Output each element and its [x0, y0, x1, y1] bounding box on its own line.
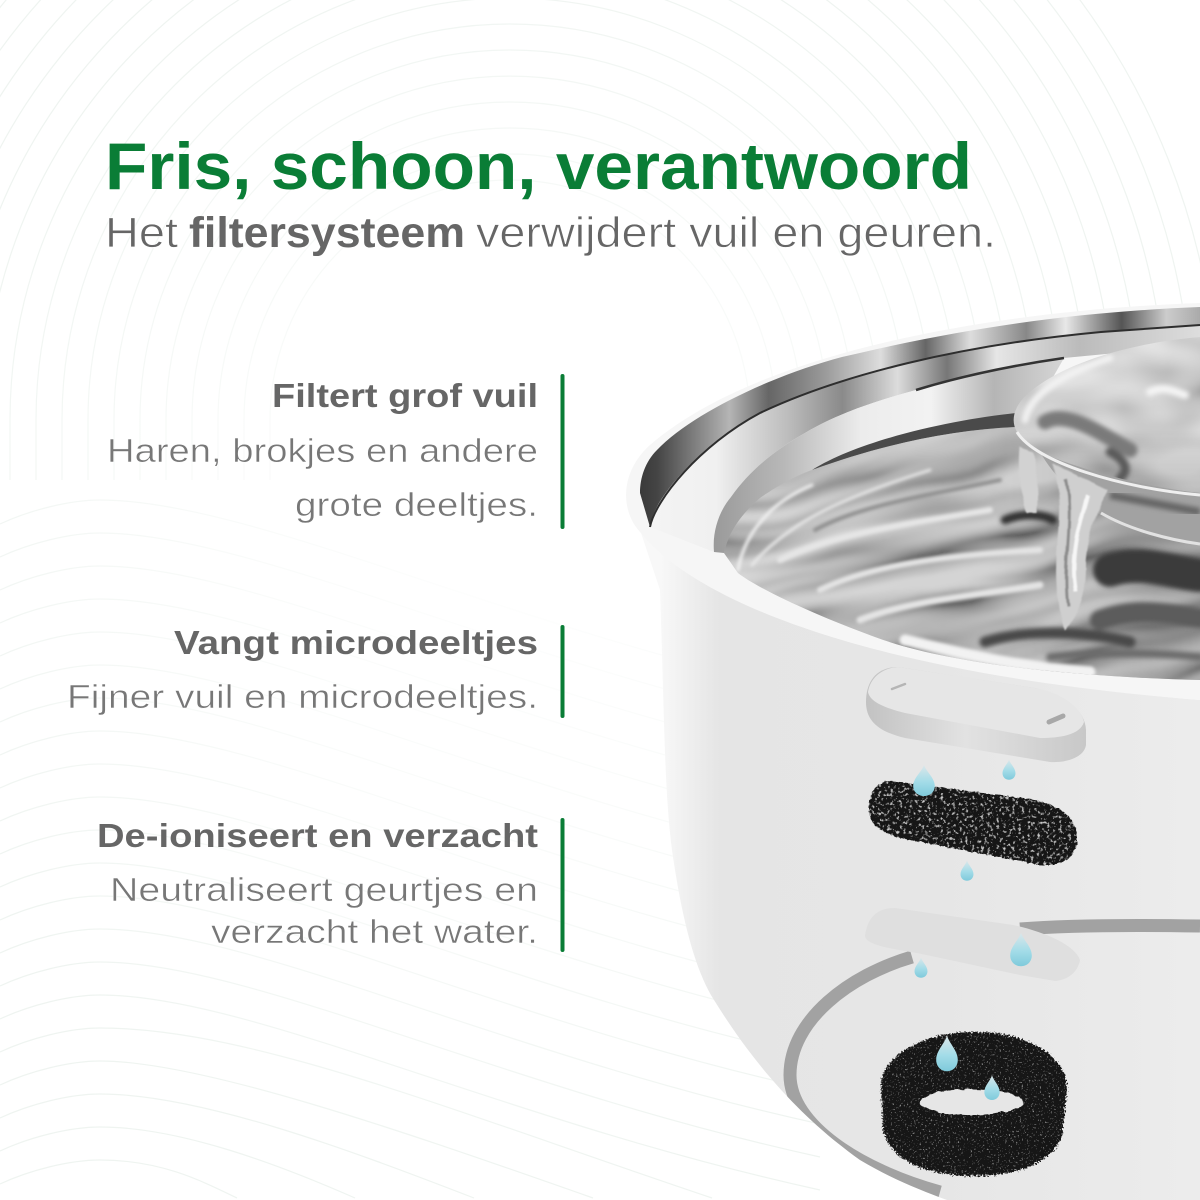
text block: filtert grof vuil: grote deeltjes.	[295, 486, 538, 523]
water drop 5	[915, 958, 927, 978]
text block: vangt microdeeltjes: Fijner vuil en microdeeltjes.	[67, 678, 538, 715]
dark water line	[812, 413, 1016, 470]
bowl rim lip	[626, 303, 1200, 700]
subtitle: Het	[105, 209, 178, 257]
bowl body	[640, 530, 1200, 1200]
text block: filtert grof vuil	[107, 374, 564, 529]
filter plate	[866, 667, 1086, 762]
text block: filtert grof vuil: Filtert grof vuil	[272, 377, 538, 414]
fountain illustration	[626, 303, 1200, 1200]
grey ring on base	[790, 925, 1200, 1192]
water ripples	[724, 427, 1200, 680]
water drop 7	[984, 1075, 1000, 1100]
water drop 6	[936, 1036, 958, 1071]
second metal band	[650, 325, 1200, 552]
dome lip and glass base	[1017, 432, 1200, 545]
carbon filter	[869, 781, 1077, 865]
text block: de-ioniseert en verzacht: Neutraliseert geurtjes en	[110, 871, 538, 908]
water drop 4	[1010, 933, 1032, 966]
text block: vangt microdeeltjes: Vangt microdeeltjes	[174, 624, 538, 661]
water drop 3	[961, 861, 973, 881]
subtitle	[105, 209, 996, 257]
water drop 2	[1003, 760, 1015, 780]
text block: de-ioniseert en verzacht	[97, 817, 564, 952]
water drop 1	[913, 765, 935, 796]
glass dome	[1014, 337, 1200, 493]
title: Fris, schoon, verantwoord	[105, 129, 972, 203]
subtitle: filtersysteem	[189, 209, 465, 257]
water streams	[1018, 447, 1108, 630]
clear filter plate	[865, 908, 1080, 981]
text block: vangt microdeeltjes	[67, 624, 564, 718]
water surface	[724, 400, 1200, 680]
foam sponge ring	[881, 1032, 1067, 1176]
inner steel wall	[714, 358, 1064, 553]
subtitle: verwijdert vuil en geuren.	[476, 209, 996, 257]
text block: filtert grof vuil: Haren, brokjes en andere	[107, 432, 538, 469]
text block: de-ioniseert en verzacht: De-ioniseert en verzacht	[97, 817, 538, 854]
metal rim band	[640, 307, 1200, 527]
text block: de-ioniseert en verzacht: verzacht het water.	[211, 913, 538, 950]
